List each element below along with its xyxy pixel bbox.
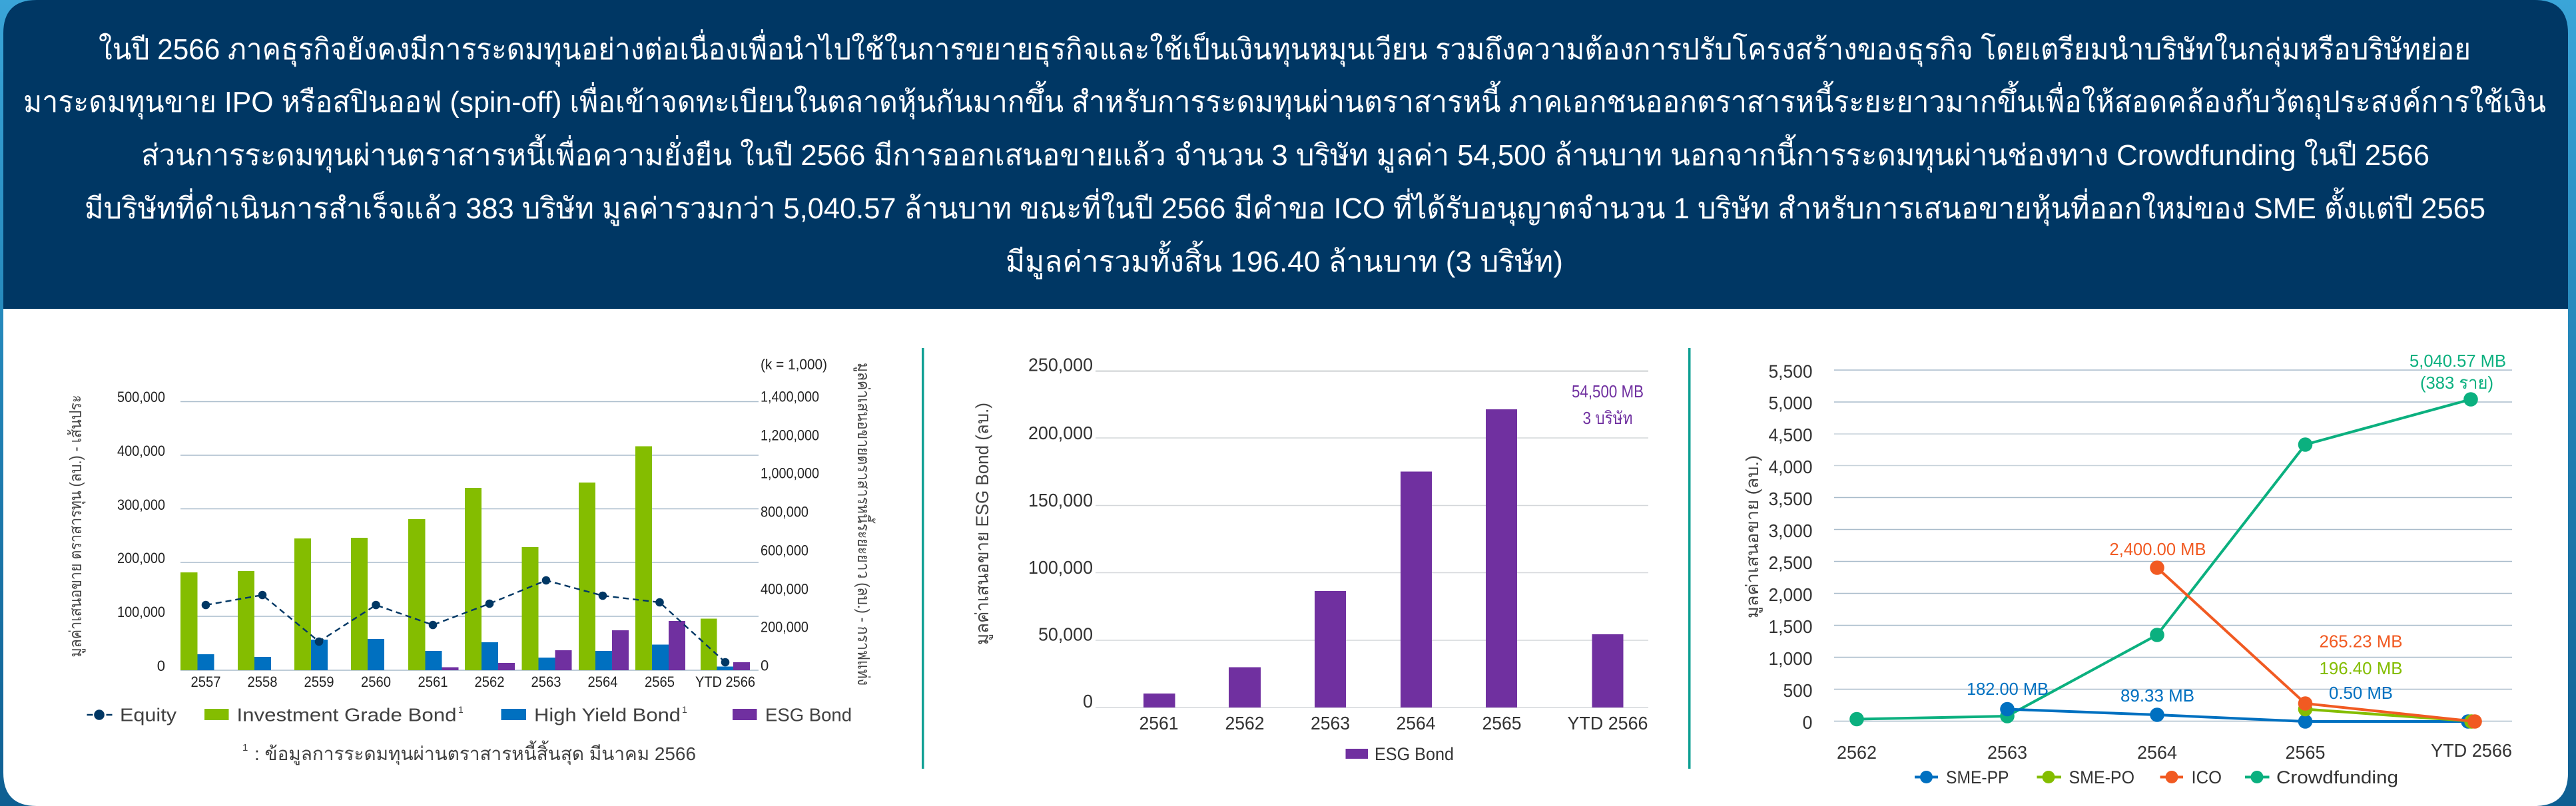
header banner — [3, 0, 2568, 309]
ICO series — [2150, 560, 2482, 729]
right axis values: 1,200,000 — [761, 427, 819, 443]
axis values: 5,500 — [1769, 361, 1813, 382]
axis values: 5,000 — [1769, 393, 1813, 413]
annotation — [1572, 381, 1644, 428]
axis values: 0 — [1802, 712, 1813, 733]
left axis values: 100,000 — [117, 604, 165, 620]
left axis values: 0 — [157, 658, 165, 674]
year labels: YTD 2566 — [2431, 740, 2512, 761]
high yield bars — [197, 639, 733, 670]
axis values: 2,500 — [1769, 552, 1813, 573]
year labels: 2563 — [531, 674, 561, 690]
left axis values: 500,000 — [117, 389, 165, 405]
right axis values — [761, 356, 827, 674]
left axis values: 200,000 — [117, 550, 165, 566]
axis values: 250,000 — [1028, 354, 1093, 375]
legend: SME-PP — [1946, 767, 2009, 787]
axis values: 200,000 — [1028, 423, 1093, 443]
year labels: 2565 — [2286, 742, 2326, 763]
year labels: 2562 — [1837, 742, 1877, 763]
legend: SME-PO — [2069, 767, 2134, 787]
legend — [1915, 767, 2398, 787]
header banner: มีมูลค่ารวมทั้งสิ้น 196.40 ล้านบาท (3 บริษัท) — [1006, 240, 1563, 280]
chart: capital raising combo bars and equity line — [67, 356, 876, 765]
legend: Crowdfunding — [2276, 767, 2398, 787]
year labels: 2564 — [587, 674, 618, 690]
year labels: 2558 — [248, 674, 277, 690]
value labels: 182.00 MB — [1967, 679, 2049, 699]
axis values: 2,000 — [1769, 584, 1813, 605]
year labels: 2562 — [1225, 713, 1264, 733]
chart legend: Equity — [120, 704, 176, 725]
right axis title: มูลค่าเสนอขายตราสารหนี้ระยะยาว (ลบ.) - กราฟแท่ง — [853, 363, 876, 686]
chart legend — [87, 704, 852, 725]
chart legend: ESG Bond — [765, 704, 852, 725]
axis values — [1028, 354, 1093, 711]
axis values: 0 — [1083, 691, 1093, 711]
chart legend: 1 — [682, 704, 687, 715]
SME-PO series — [2298, 702, 2479, 729]
legend — [1345, 744, 1454, 764]
value labels: 196.40 MB — [2319, 658, 2403, 678]
right axis values: 800,000 — [761, 503, 808, 520]
SME-PP series — [2000, 702, 2475, 729]
value labels: 265.23 MB — [2319, 631, 2403, 651]
annotation: 54,500 MB — [1572, 381, 1644, 401]
white content panel — [3, 200, 2568, 806]
chart legend: Investment Grade Bond — [237, 704, 457, 725]
year labels: 2565 — [1482, 713, 1521, 733]
crowdfunding series — [1849, 392, 2478, 726]
axis values: 1,500 — [1769, 616, 1813, 637]
year labels: YTD 2566 — [1568, 713, 1648, 733]
right axis values: 0 — [761, 658, 769, 674]
left axis values: 300,000 — [117, 497, 165, 513]
axis values — [1769, 361, 1813, 733]
investment grade bars — [180, 446, 717, 670]
divider right — [1688, 348, 1690, 769]
value labels: 0.50 MB — [2329, 683, 2393, 703]
axis title: มูลค่าเสนอขาย (ลบ.) — [1742, 455, 1763, 618]
right axis values: 200,000 — [761, 619, 808, 635]
header banner: ในปี 2566 ภาคธุรกิจยังคงมีการระดมทุนอย่างต่อเนื่องเพื่อนำไปใช้ในการขยายธุรกิจและใช้เป็นเงินทุนหมุนเวียน รวมถึงความต้องการปรับโครงสร้างของธุรกิจ โดยเตรียมนำบริษัทในกลุ่มหรือบริษัทย่อย — [99, 29, 2471, 67]
year labels: 2559 — [304, 674, 334, 690]
year labels: 2561 — [418, 674, 448, 690]
right axis values: 600,000 — [761, 542, 808, 559]
axis values: 3,500 — [1769, 489, 1813, 509]
year labels — [1139, 713, 1648, 733]
axis title: มูลค่าเสนอขาย ESG Bond (ลบ.) — [972, 403, 993, 645]
year labels: 2562 — [474, 674, 505, 690]
year labels: 2563 — [1311, 713, 1350, 733]
year labels — [190, 674, 755, 690]
year labels: 2564 — [2137, 742, 2177, 763]
chart legend: High Yield Bond — [534, 704, 681, 725]
left axis title: มูลค่าเสนอขาย ตราสารทุน (ลบ.) - เส้นประ — [67, 395, 86, 658]
axis values: 500 — [1783, 680, 1813, 701]
value labels: (383 ราย) — [2420, 373, 2493, 393]
footnote: : ข้อมูลการระดมทุนผ่านตราสารหนี้สิ้นสุด มีนาคม 2566 — [254, 740, 696, 765]
axis values: 3,000 — [1769, 520, 1813, 541]
chart legend: 1 — [458, 704, 464, 715]
year labels: 2560 — [361, 674, 391, 690]
divider left — [922, 348, 924, 769]
year labels: 2557 — [190, 674, 221, 690]
chart: ESG bond bars — [972, 354, 1648, 764]
annotation: 3 บริษัท — [1582, 408, 1633, 428]
axis values: 150,000 — [1028, 490, 1093, 510]
value labels: 89.33 MB — [2120, 686, 2194, 705]
legend: ICO — [2191, 767, 2222, 787]
legend: ESG Bond — [1375, 744, 1454, 764]
year labels: 2561 — [1139, 713, 1179, 733]
right axis values: 1,400,000 — [761, 389, 819, 405]
axis values: 1,000 — [1769, 648, 1813, 669]
ESG bars — [442, 621, 750, 670]
value labels — [1967, 351, 2506, 705]
axis values: 4,500 — [1769, 425, 1813, 445]
right axis values: 1,000,000 — [761, 465, 819, 482]
chart: SME, ICO and crowdfunding lines — [1742, 351, 2512, 787]
year labels — [1837, 740, 2512, 763]
ESG bars — [1143, 409, 1624, 707]
axis values: 50,000 — [1038, 624, 1093, 644]
value labels: 2,400.00 MB — [2110, 539, 2206, 559]
right axis values: (k = 1,000) — [761, 356, 827, 373]
axis values: 4,000 — [1769, 457, 1813, 477]
value labels: 5,040.57 MB — [2410, 351, 2506, 371]
left axis values — [117, 389, 165, 674]
left axis values: 400,000 — [117, 443, 165, 459]
right axis values: 400,000 — [761, 580, 808, 598]
header banner: ส่วนการระดมทุนผ่านตราสารหนี้เพื่อความยั่งยืน ในปี 2566 มีการออกเสนอขายแล้ว จำนวน 3 บริษัท มูลค่า 54,500 ล้านบาท นอกจากนี้การระดมทุนผ่านช่องทาง Crowdfunding ในปี 2566 — [141, 134, 2429, 173]
equity dashed line — [202, 576, 729, 666]
footnote: 1 — [242, 742, 248, 753]
year labels: 2563 — [1987, 742, 2027, 763]
year labels: 2565 — [645, 674, 675, 690]
axis values: 100,000 — [1028, 557, 1093, 578]
year labels: YTD 2566 — [695, 674, 755, 690]
header banner: มีบริษัทที่ดำเนินการสำเร็จแล้ว 383 บริษัท มูลค่ารวมกว่า 5,040.57 ล้านบาท ขณะที่ในปี 2566 มีคำขอ ICO ที่ได้รับอนุญาตจำนวน 1 บริษัท สำหรับการเสนอขายหุ้นที่ออกใหม่ของ SME ตั้งแต่ปี 2565 — [85, 187, 2485, 226]
year labels: 2564 — [1396, 713, 1436, 733]
header banner: มาระดมทุนขาย IPO หรือสปินออฟ (spin-off) เพื่อเข้าจดทะเบียนในตลาดหุ้นกันมากขึ้น สำหรับการระดมทุนผ่านตราสารหนี้ ภาคเอกชนออกตราสารหนี้ระยะยาวมากขึ้นเพื่อให้สอดคล้องกับวัตถุประสงค์การใช้เงิน — [23, 81, 2546, 120]
